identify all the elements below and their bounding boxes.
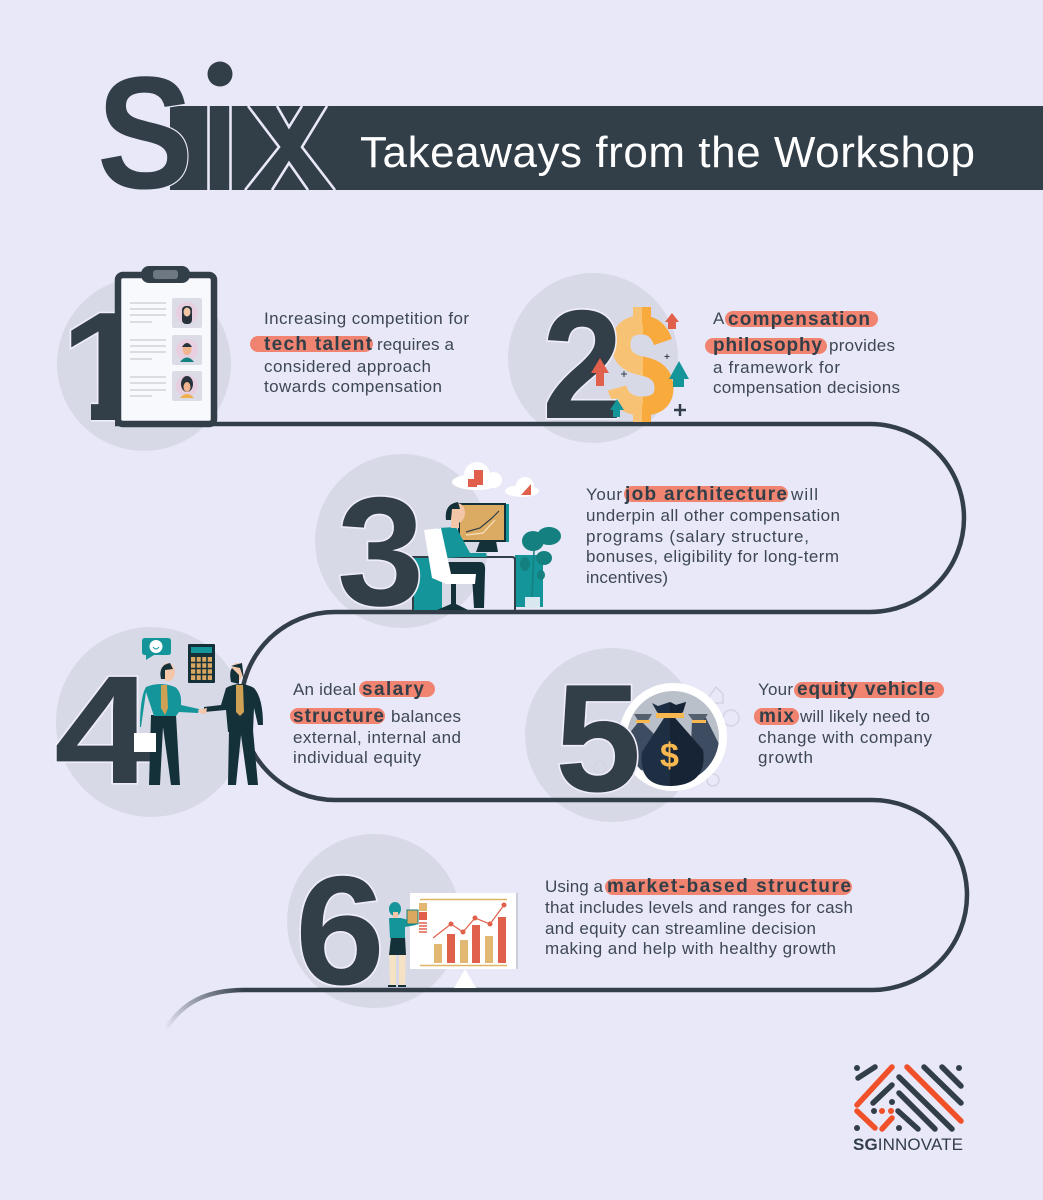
text block 1: considered approach [264,357,431,376]
text block 2: A [713,309,725,328]
icon: money bags [619,683,727,791]
text block 6 [545,876,853,958]
number 2: 2 [542,278,623,451]
icon: man in teal shirt [134,663,199,785]
text block 2: compensation decisions [713,378,900,397]
text block 1: tech talent [264,334,373,355]
cloud icons [468,470,531,495]
text block 4: balances [391,707,461,726]
step 3 [337,462,840,639]
icon: money bags: $ [660,737,679,775]
text block 3: incentives) [586,568,668,587]
number 5: 5 [555,652,641,824]
text block 1: towards compensation [264,377,442,396]
logo wordmark: SGINNOVATE [853,1135,963,1154]
icon: calculator [188,644,215,683]
text block 4: external, internal and [293,728,461,747]
text block 2: provides [829,336,895,355]
number 1: 1 [60,280,152,453]
highlight: job architecture [624,486,788,502]
title text: Takeaways from the Workshop [360,128,975,177]
background circles [56,273,699,1008]
icon: dollar sign [617,307,664,422]
icon: faint line icons [594,687,739,786]
icon: clipboard with candidates [118,266,214,424]
text block 1: requires a [377,335,455,354]
text block 1 [264,309,469,396]
highlight: market-based structure [605,879,852,895]
connecting path [115,424,967,1030]
icon: growth arrows [591,313,689,417]
text block 6: Using a [545,877,604,896]
desk [412,556,442,610]
number 3: 3 [337,466,424,639]
text block 3: bonuses, eligibility for long-term [586,547,839,566]
text block 4: structure [293,706,384,727]
logo mark [857,1067,961,1129]
number 6: 6 [295,844,385,1017]
dot of i [208,62,232,86]
text block 3: Your [586,485,622,504]
number 4: 4 [54,643,154,816]
text block 6: and equity can streamline decision [545,919,816,938]
title bar [170,106,1043,190]
text block 4: An ideal [293,680,356,699]
X letter outline [208,106,335,190]
step 6 [295,844,853,1017]
clouds [452,462,539,497]
step 2 [542,278,900,451]
text block 1: Increasing competition for [264,309,469,328]
text block 4 [293,679,461,767]
logo dots [854,1065,962,1131]
text block 3: will [790,485,818,504]
letter S: S [97,44,193,223]
highlight: salary structure [290,681,435,724]
text block 4: salary [362,679,424,700]
icon: presentation board [410,893,518,988]
text block 5 [758,679,935,767]
text block 2: a framework for [713,358,840,377]
text block 3: job architecture [624,484,787,505]
text block 2: compensation [728,309,870,330]
icon: speech bubble [142,638,171,660]
text block 2 [713,309,900,397]
text block 6: making and help with healthy growth [545,939,836,958]
title [97,44,1043,223]
icon: woman presenting [388,902,418,987]
text block 3: programs (salary structure, [586,527,809,546]
text block 3 [586,484,840,587]
text block 2: philosophy [713,335,822,356]
monitor [498,504,509,542]
icon: bearded man in suit [198,663,263,785]
icon: person at desk [412,462,561,610]
step 4 [54,638,461,816]
text block 5: equity vehicle [797,679,935,700]
highlight: equity vehicle mix [754,682,944,725]
text block 3: underpin all other compensation [586,506,840,525]
step 5 [558,681,944,794]
logo: SGInnovate [853,1065,963,1154]
text block 5: Your [758,680,793,699]
text block 6: market-based structure [607,876,851,897]
person [438,527,487,558]
text block 5: growth [758,748,813,767]
text block 6: that includes levels and ranges for cash [545,898,853,917]
highlight: compensation philosophy [705,311,878,354]
text block 5: mix [759,706,794,727]
plant [520,527,561,598]
text block 5: will likely need to [799,707,930,726]
text block 5: change with company [758,728,932,747]
highlight: tech talent [250,336,373,352]
chair [424,528,476,584]
text block 4: individual equity [293,748,422,767]
step 1 [70,266,469,428]
